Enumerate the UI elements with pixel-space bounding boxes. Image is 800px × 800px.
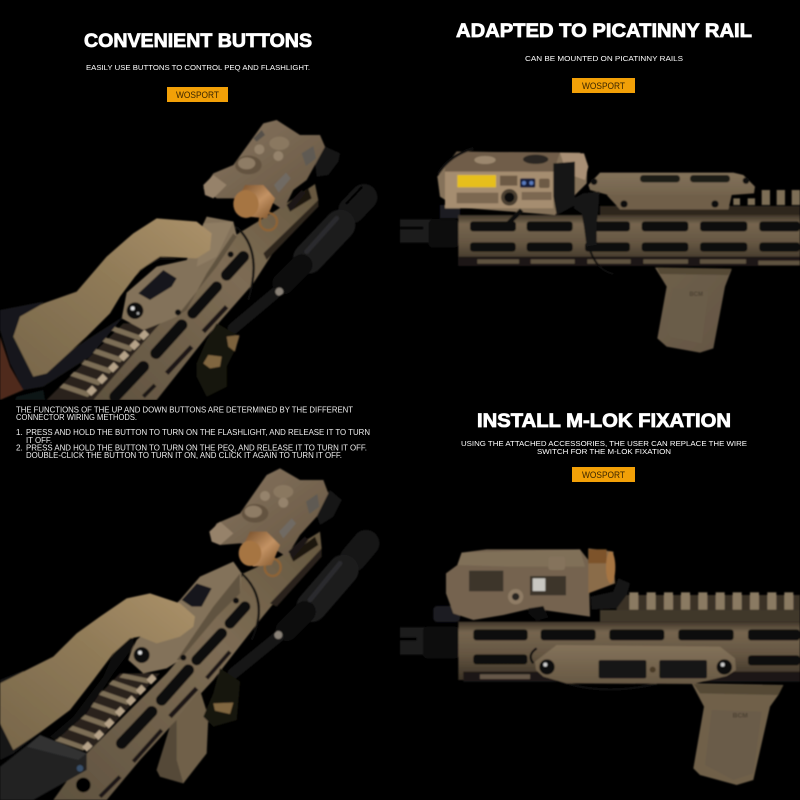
step 2: 2. bbox=[16, 444, 23, 452]
pressure switch bbox=[128, 562, 242, 673]
title: install m-lok fixation: INSTALL M-LOK FIXATION bbox=[477, 410, 731, 432]
connector bbox=[574, 192, 599, 247]
peq laser unit bbox=[437, 148, 588, 225]
copper cap bbox=[233, 185, 277, 230]
badge: wosport: WOSPORT bbox=[582, 470, 625, 481]
badge: wosport bbox=[572, 467, 635, 482]
badge: wosport: WOSPORT bbox=[582, 81, 625, 92]
photo: side view with m-lok switch bbox=[400, 548, 800, 785]
step 2 bbox=[16, 444, 367, 460]
intro text: THE FUNCTIONS OF THE UP AND DOWN BUTTONS ARE DETERMINED BY THE DIFFERENT bbox=[16, 406, 353, 414]
title: adapted to picatinny rail: ADAPTED TO PICATINNY RAIL bbox=[456, 20, 752, 42]
subtitle: using the attached accessories: SWITCH FOR THE M-LOK FIXATION bbox=[537, 447, 671, 456]
barrel and muzzle bbox=[400, 205, 460, 248]
barrel and muzzle bbox=[400, 606, 460, 658]
lower fingers bbox=[203, 668, 240, 727]
pressure switch bbox=[588, 173, 755, 209]
panel: install m-lok fixation header bbox=[461, 410, 747, 482]
grip bbox=[692, 683, 783, 785]
photo: side view on picatinny rail bbox=[400, 148, 800, 353]
stock bbox=[0, 735, 91, 800]
grip bbox=[157, 690, 208, 783]
handguard bbox=[93, 184, 318, 400]
cable loop bbox=[531, 648, 657, 689]
copper cap bbox=[588, 548, 615, 593]
flashlight bbox=[233, 187, 364, 328]
photo: hand on pressure switch, bottom left bbox=[0, 468, 366, 800]
angled connector bbox=[591, 578, 630, 609]
panel: wiring instructions bbox=[16, 406, 370, 460]
intro text bbox=[16, 406, 353, 422]
step 1: 1. bbox=[16, 428, 23, 437]
step 2: PRESS AND HOLD THE BUTTON TO TURN ON THE PEQ, AND RELEASE IT TO TURN IT OFF. bbox=[26, 444, 367, 452]
subtitle: can be mounted: CAN BE MOUNTED ON PICATINNY RAILS bbox=[525, 54, 683, 63]
badge: wosport bbox=[167, 87, 228, 102]
cable bbox=[590, 250, 613, 274]
picatinny rail bbox=[55, 673, 160, 752]
step 1: PRESS AND HOLD THE BUTTON TO TURN ON THE FLASHLIGHT, AND RELEASE IT TO TURN bbox=[26, 428, 370, 437]
glove bbox=[0, 593, 195, 760]
cable bbox=[236, 227, 254, 300]
title: convenient buttons: CONVENIENT BUTTONS bbox=[84, 30, 312, 52]
badge: wosport: WOSPORT bbox=[176, 90, 219, 101]
subtitle: using the attached accessories: USING THE ATTACHED ACCESSORIES, THE USER CAN REPLACE THE WIRE bbox=[461, 439, 747, 448]
peq laser unit bbox=[203, 120, 340, 212]
top rail bbox=[600, 592, 800, 622]
handguard bbox=[458, 215, 800, 266]
peq laser unit bbox=[446, 549, 590, 621]
m-lok pressure switch bbox=[535, 645, 736, 684]
grip: BCM bbox=[689, 292, 703, 298]
pressure switch bbox=[122, 217, 237, 330]
step 2: DOUBLE-CLICK THE BUTTON TO TURN IT ON, AND CLICK IT AGAIN TO TURN IT OFF. bbox=[26, 451, 342, 460]
grip bbox=[655, 267, 732, 353]
lower fingers bbox=[197, 323, 240, 397]
handguard bbox=[458, 622, 800, 682]
step 1: IT OFF. bbox=[26, 436, 52, 445]
peq laser unit bbox=[209, 468, 342, 558]
flashlight bbox=[233, 543, 366, 673]
handguard bbox=[53, 532, 322, 800]
step 1 bbox=[16, 428, 370, 445]
top rail bbox=[600, 190, 800, 216]
subtitle: easily use buttons: EASILY USE BUTTONS TO CONTROL PEQ AND FLASHLIGHT. bbox=[86, 63, 310, 72]
cable bbox=[242, 573, 259, 640]
copper cap bbox=[239, 532, 281, 576]
badge: wosport bbox=[572, 78, 635, 93]
grip: BCM bbox=[733, 712, 748, 719]
subtitle: using the attached accessories bbox=[461, 439, 747, 456]
panel: adapted to picatinny rail header bbox=[456, 20, 752, 93]
panel: convenient buttons header bbox=[84, 30, 312, 102]
picatinny rail bbox=[47, 323, 160, 400]
glove bbox=[0, 218, 212, 400]
intro text: CONNECTOR WIRING METHODS. bbox=[16, 413, 137, 422]
photo: hand on pressure switch, top left bbox=[0, 120, 364, 400]
